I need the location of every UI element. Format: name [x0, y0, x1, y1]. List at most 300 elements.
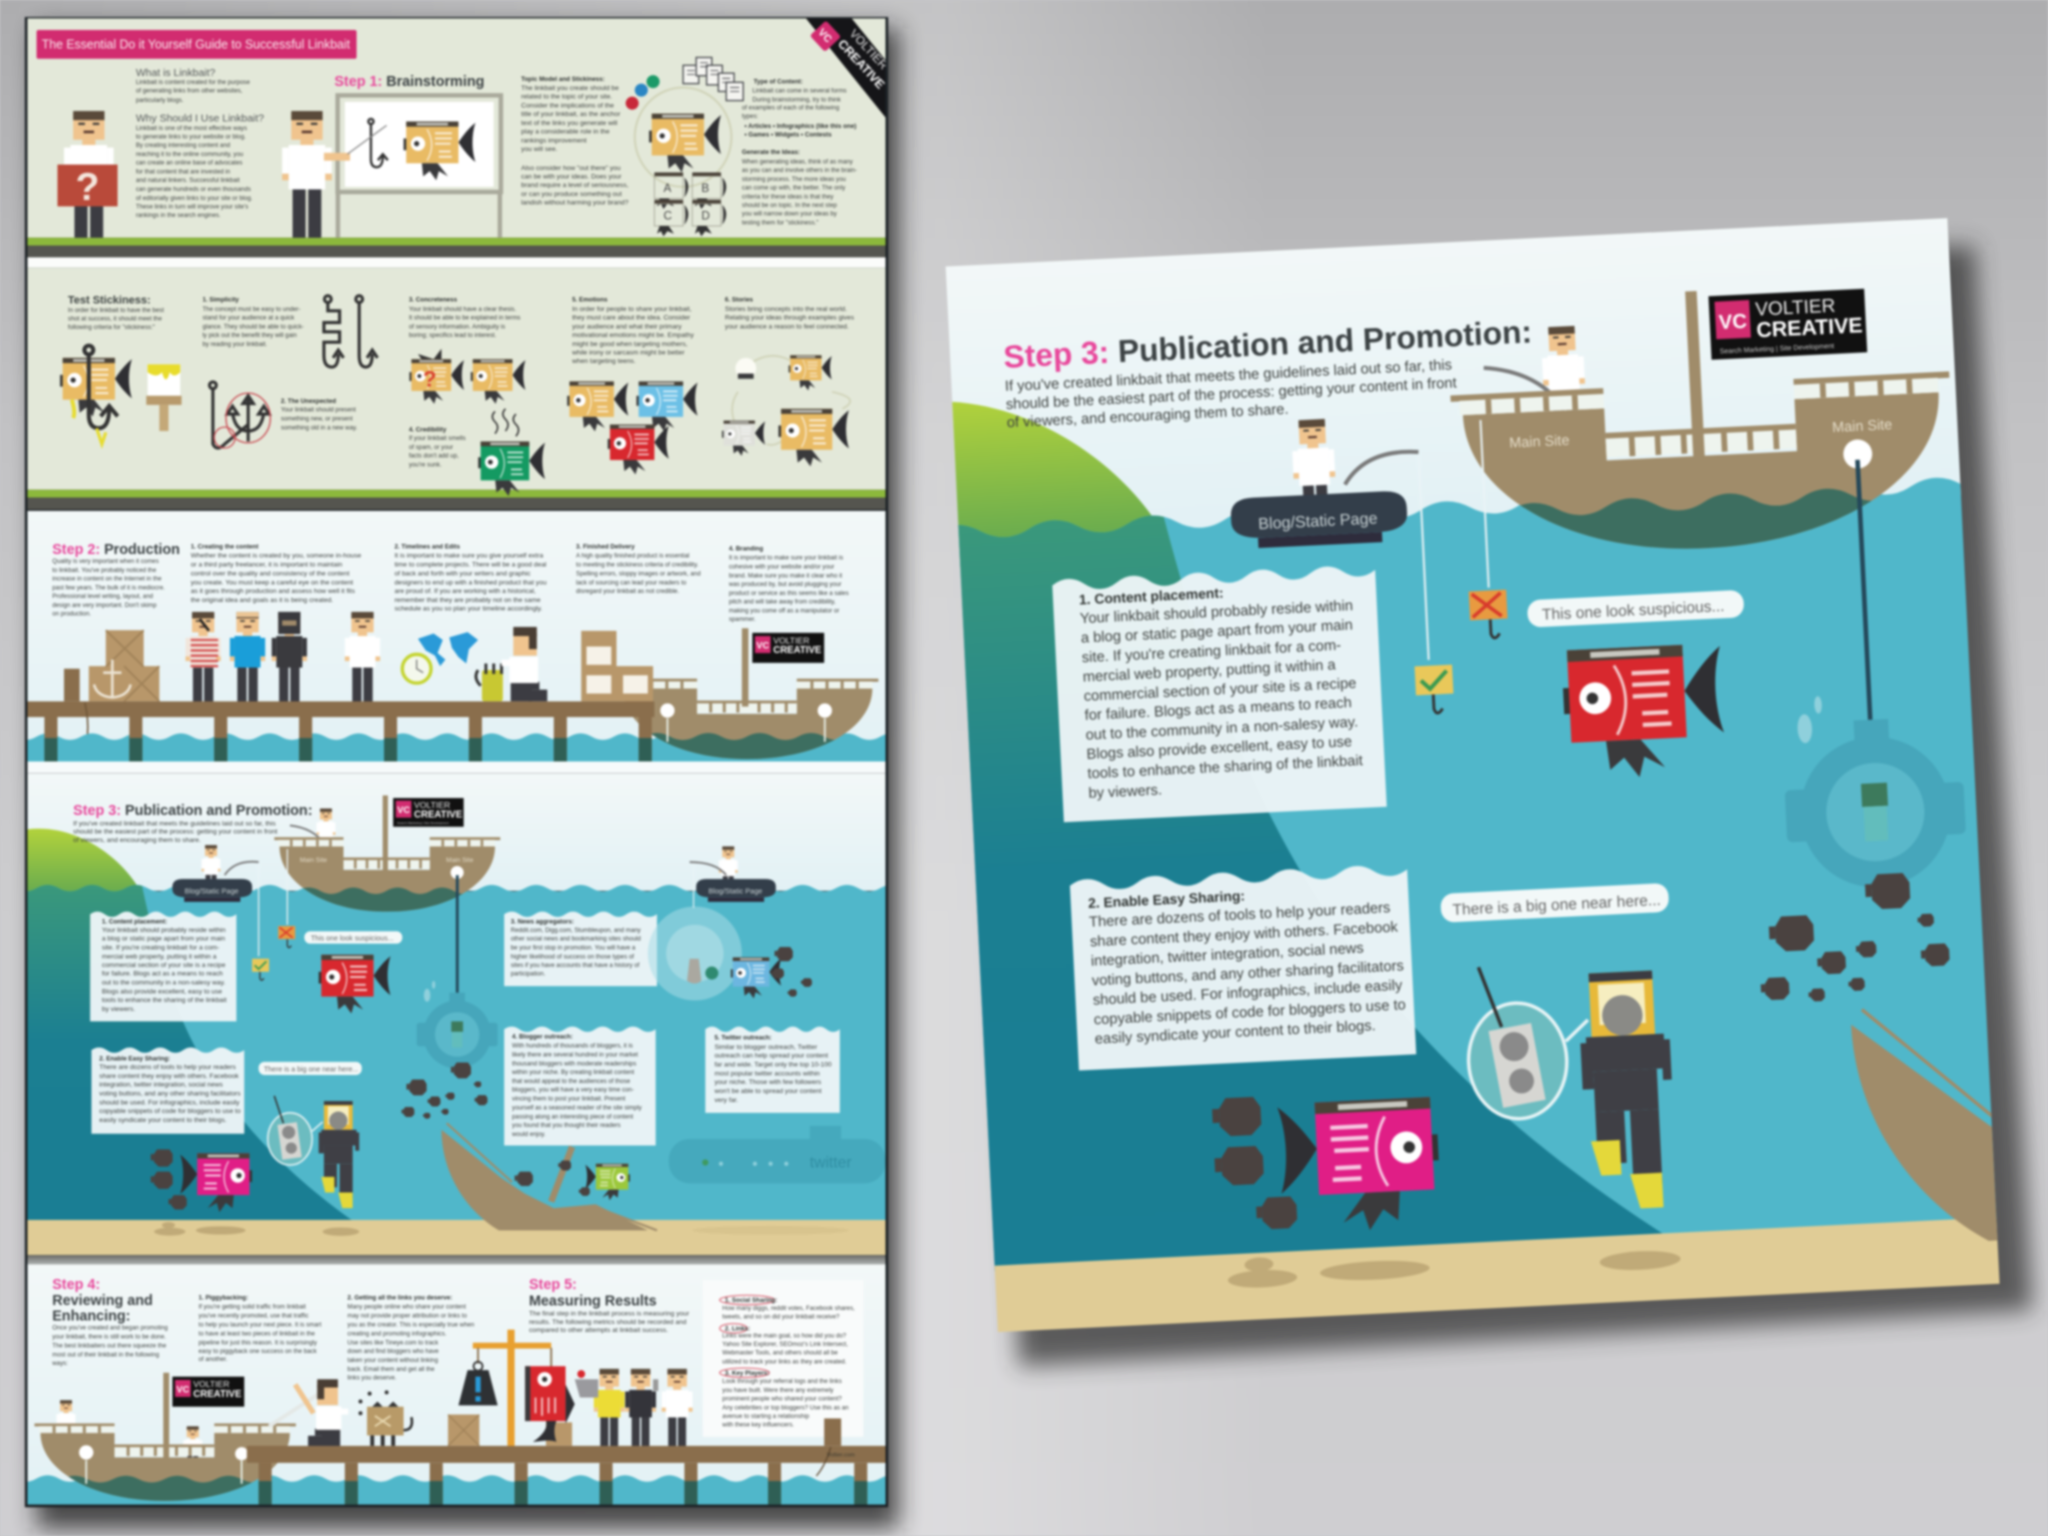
logo flag: VOLTIER: [1755, 296, 1836, 321]
text: simplicity: 1. Simplicity: [202, 297, 239, 304]
text: news aggregators: other social news and bookmarking sites should: [511, 936, 641, 943]
dock: [27, 701, 654, 761]
submarine: [1780, 689, 1968, 891]
text: creating the content: the original idea and goals as it is being created.: [191, 597, 333, 604]
hill above water: [905, 390, 1175, 569]
text: branding: It is important to make sure your linkbait is: [729, 555, 843, 562]
text: content placement: mercial web property, putting it within a: [1082, 657, 1337, 686]
text: why use linkbait: By creating interesting content and: [136, 142, 231, 149]
metrics column: prominent people who shared your content?: [722, 1396, 842, 1403]
text: timelines and edits: are proud of. If you are working with a historical,: [394, 588, 536, 595]
pink fish with followers: [1212, 1088, 1442, 1237]
text: getting the links: Use sites like Tineye.com to track: [347, 1339, 439, 1346]
metrics column: Webmaster Tools, and others should all be: [722, 1350, 838, 1357]
dock: [247, 1418, 886, 1505]
fish with question mark: ?: [423, 367, 436, 392]
logo flag: VOLTIER: [414, 800, 450, 810]
trident hook: [210, 382, 270, 448]
text: getting the links: down and find bloggers who have: [347, 1348, 439, 1355]
text: step 2 intro: to linkbait. You've probably noticed the: [52, 567, 157, 574]
text: branding: making you come off as a manipulator or: [729, 607, 839, 614]
text: content placement: a blog or static page apart from your main: [1081, 617, 1353, 647]
text: branding: product or service as this seems like a sales: [729, 590, 849, 597]
text: why use linkbait: of editorially given links to your site or blog.: [136, 195, 253, 202]
text: piggybacking: pipeline for just this reason. It is surprisingly: [199, 1339, 318, 1346]
text: blogger outreach: passing along an interesting piece of content: [512, 1113, 634, 1120]
fisherman on small boat: [1226, 414, 1423, 549]
mine cluster: [1756, 871, 1951, 1004]
ship with logo flag: CREATIVE: [773, 645, 822, 656]
text: credibility: of spam, or your: [409, 444, 453, 451]
text: creating the content: control over the quality and consistency of the content: [191, 570, 350, 577]
text: timelines and edits: designers to end up with a finished product that you: [394, 579, 547, 586]
text: type of content and generate ideas: When generating ideas, think of as many: [742, 158, 854, 165]
panel: zoomed step 3 detail: [722, 127, 2048, 1363]
text: what is linkbait: What is Linkbait?: [136, 68, 216, 79]
text: step 4 intro: ways:: [51, 1360, 68, 1367]
text: type of content and generate ideas: • Articles • Infographics (like this one): [744, 123, 856, 130]
press crew: [575, 1369, 693, 1447]
logo flag: VC: [1718, 311, 1748, 334]
sand floor: [27, 1220, 886, 1255]
text: enable easy sharing: should be used. For infographics, include easily: [1092, 978, 1403, 1009]
text: branding: spammer.: [729, 616, 756, 623]
ship with crew and flag: VOLTIER: [193, 1379, 230, 1389]
shipwreck: [441, 1123, 657, 1230]
panel: step 2 production: [0, 511, 1775, 768]
text: enable easy sharing: copyable snippets of code for bloggers to use to: [99, 1108, 241, 1115]
diver: [319, 1101, 359, 1208]
text: credibility: you're sunk.: [409, 461, 442, 468]
text: blogger outreach: 4. Blogger outreach:: [512, 1033, 573, 1040]
text: blogger outreach: within your niche. By creating linkbait content: [511, 1069, 635, 1076]
text: concreteness: boring; specifics lead to interest.: [409, 332, 497, 339]
text: emotions: when targeting teens.: [571, 358, 636, 365]
sand floor: [947, 1215, 2047, 1355]
text: content placement: mercial web property, putting it within a: [102, 953, 217, 960]
text: why use linkbait: can generate hundreds or even thousands: [136, 186, 251, 193]
text: type of content and generate ideas: types:: [742, 113, 759, 120]
story fish cycle: [722, 355, 850, 466]
anchor cable: [1855, 460, 1874, 743]
metrics column: with these key influencers.: [721, 1421, 794, 1428]
text: blogger outreach: you found that you thought their readers: [512, 1122, 621, 1129]
text: step 5 intro: compared to other attempts at linkbait success.: [529, 1327, 668, 1334]
text box 5 background: [705, 1027, 840, 1113]
text: credibility: If your linkbait smells: [409, 435, 466, 442]
radio in bubble: [268, 1096, 323, 1165]
text: content placement: Blogs also provide excellent, easy to use: [1086, 734, 1352, 763]
red fish: [319, 955, 391, 1014]
text: twitter outreach: very far.: [714, 1097, 738, 1104]
step 5 heading: Measuring Results: [529, 1293, 657, 1309]
anchor cable: [456, 875, 459, 1003]
text box 1 background: [90, 912, 236, 1021]
text: content placement: site. If you're creating linkbait for a com-: [1081, 638, 1341, 666]
metrics column: you have built. Were there any extremely: [722, 1387, 834, 1394]
text: enable easy sharing: share content they enjoy with others. Facebook: [99, 1073, 239, 1080]
logo flag: CREATIVE: [1756, 313, 1863, 342]
metrics column: 3. Key Players:: [725, 1370, 769, 1377]
step 1 heading: Step 1: Brainstorming: [334, 74, 484, 90]
speech bubble big one: There is a big one near here...: [1452, 892, 1661, 919]
text: step 3 intro: of viewers, and encouraging them to share.: [73, 837, 201, 844]
shipping boxes: [581, 631, 653, 701]
text: enable easy sharing: voting buttons, and any other sharing facilitators: [1092, 958, 1404, 989]
text: branding: brand. Make sure you make it clear who it: [729, 572, 842, 579]
metrics column: How many diggs, reddit votes, Facebook shares,: [722, 1305, 855, 1312]
text: test stickiness intro: shot at success, it should meet the: [68, 316, 162, 323]
step 3 heading: Step 3: Publication and Promotion:: [73, 803, 312, 819]
diver: [1577, 970, 1678, 1211]
text: finished delivery: lack of sourcing can lead your readers to: [576, 579, 687, 586]
sea: [735, 427, 2048, 1282]
left fisherman boat: Blog/Static Page: [185, 886, 239, 895]
shipwreck: [1850, 988, 2048, 1247]
main ship: [1400, 197, 2048, 580]
text: timelines and edits: of back and forth with your writers and graphic: [394, 570, 531, 577]
text: type of content and generate ideas: you will narrow down your ideas by: [742, 211, 838, 218]
hook icons: [324, 296, 377, 367]
main ship: Main Site: [1832, 417, 1893, 436]
ship with logo flag: VC: [756, 640, 770, 650]
text: step 2 intro: on production.: [52, 611, 91, 618]
text: emotions: In order for people to share your linkbait,: [572, 306, 692, 313]
text: creating the content: you create. You must keep a careful eye on the content: [191, 579, 353, 586]
text: content placement: for failure. Blogs act as a means to reach: [102, 971, 223, 978]
text: enable easy sharing: integration, twitter integration, social news: [1091, 941, 1364, 970]
text: blogger outreach: would enjoy.: [511, 1131, 546, 1138]
text: piggybacking: you've recently promoted, use that traffic: [199, 1313, 309, 1320]
man holding question mark sign: [57, 111, 118, 238]
text: getting the links: may not provide proper attribution or links to: [347, 1313, 468, 1320]
panel: steps 4 and 5: [0, 1264, 1192, 1509]
document icons: [683, 57, 743, 101]
step 3 heading: Step 3: Publication and Promotion:: [1003, 313, 1533, 375]
text box 3 background: [504, 912, 657, 986]
text: content placement: a blog or static page apart from your main: [102, 936, 225, 943]
text: why use linkbait: Linkbait is one of the most effective ways: [136, 125, 247, 132]
panel: test stickiness: [27, 257, 886, 509]
text: topic model and stickiness: Consider the implications of the: [521, 102, 614, 109]
grass strip: [27, 238, 886, 246]
text: topic model and stickiness: brand require a level of seriousness,: [521, 182, 629, 189]
text: enable easy sharing: share content they enjoy with others. Facebook: [1090, 919, 1399, 950]
fisherman on small boat: Blog/Static Page: [1258, 509, 1378, 533]
text box 1 background: [1052, 564, 1387, 822]
main ship: Main Site: [446, 857, 474, 864]
text: content placement: Your linkbait should probably reside within: [102, 927, 226, 934]
metrics column: utilized to track your links as they are created.: [722, 1359, 847, 1366]
text: branding: was produced by, but avoid plugging your: [728, 581, 841, 588]
pink fish with followers: [151, 1149, 252, 1212]
text: news aggregators: Reddit.com, Digg.com, Stumbleupon, and many: [511, 927, 642, 934]
text: emotions: while irony or sarcasm might be better: [571, 349, 685, 356]
credit: Voltier.com: [827, 1452, 855, 1458]
text: blogger outreach: that would appeal to the audiences of those: [512, 1078, 631, 1085]
text: type of content and generate ideas: as you can and involve others in the brain-: [742, 167, 857, 174]
text: piggybacking: 1. Piggybacking:: [199, 1295, 248, 1302]
text: type of content and generate ideas: criteria for these ideas is that they: [742, 193, 834, 200]
text: topic model and stickiness: title of your linkbait, as the anchor: [521, 111, 621, 118]
text: why use linkbait: can create an online base of advocates: [136, 160, 242, 167]
text: creating the content: 1. Creating the content: [191, 544, 258, 551]
weighed red fish: [525, 1366, 575, 1446]
text: getting the links: taken your content without linking: [347, 1357, 439, 1364]
right panel shadow: [973, 246, 2032, 1366]
metrics column: tweets, and so on did your linkbait receive?: [722, 1314, 840, 1321]
panel: intro and step 1 brainstorming: [27, 18, 890, 257]
text: content placement: commercial section of your site is a recipe: [102, 962, 226, 969]
logo flag: Search Marketing | Site Development: [397, 821, 449, 825]
ship with logo flag: [593, 628, 1775, 768]
text: piggybacking: to have at least two pieces of linkbait in the: [199, 1330, 316, 1337]
text: test stickiness intro: Test Stickiness:: [68, 295, 151, 307]
speech bubble big one: [1440, 883, 1669, 923]
panel: step 3 publication and promotion: [0, 773, 1275, 1255]
text: step 2 intro: Quality is very important when it comes: [52, 558, 159, 565]
text: piggybacking: to help you launch your next piece. It is smart: [199, 1321, 322, 1328]
text: topic model and stickiness: you will see.: [521, 146, 558, 153]
text: emotions: your audience and what their primary: [572, 323, 682, 330]
text: timelines and edits: 2. Timelines and Edits: [394, 544, 461, 551]
speech bubble suspicious: [304, 931, 402, 944]
text: simplicity: glance. They should be able to quick-: [202, 323, 304, 330]
text: type of content and generate ideas: storming process. The more ideas you: [742, 176, 846, 183]
text: content placement: out to the community in a non-salesy way.: [1085, 714, 1358, 744]
metrics column: Links were the main goal, so how did you do?: [722, 1332, 847, 1339]
text: twitter outreach: outreach can help spread your content: [714, 1053, 828, 1060]
metrics column: Any celebrities or top bloggers? Use this as an: [722, 1404, 849, 1411]
text: twitter outreach: most popular twitter accounts within: [714, 1070, 820, 1077]
text: getting the links: Many people online who share your content: [347, 1304, 466, 1311]
text: type of content and generate ideas: During brainstorming, try to think: [752, 96, 842, 103]
text: getting the links: creating and promoting infographics.: [347, 1330, 447, 1337]
text: type of content and generate ideas: testing them for "stickiness.": [742, 220, 818, 227]
text: content placement: tools to enhance the sharing of the linkbait: [102, 997, 227, 1004]
fishing lines with hooked fish: [252, 849, 295, 980]
text: branding: 4. Branding: [729, 546, 763, 553]
text: twitter outreach: 5. Twitter outreach:: [714, 1035, 772, 1042]
logo flag: CREATIVE: [414, 810, 463, 821]
text: news aggregators: participation.: [511, 971, 546, 978]
text: branding: cohesive with your website and/or your: [729, 564, 834, 571]
text: type of content and generate ideas: Type of Content:: [754, 79, 803, 86]
corner ribbon logo: CREATIVE: [835, 37, 887, 92]
red fish: [1561, 643, 1726, 781]
text: step 5 intro: results. The following metrics should be recorded and: [529, 1319, 687, 1326]
text: topic model and stickiness: landish without harming your brand?: [521, 200, 629, 207]
text: the unexpected: 2. The Unexpected: [281, 398, 336, 405]
kneeling man with sword: [269, 1379, 348, 1446]
text: why use linkbait: for that content that are invested in: [136, 168, 231, 175]
text: news aggregators: 3. News aggregators:: [511, 918, 574, 925]
text: stories: Relating your ideas through examples gives: [725, 314, 855, 321]
step 4 heading: Enhancing:: [52, 1308, 130, 1324]
ship with crew and flag: VC: [177, 1384, 190, 1394]
submarine with diver: [417, 981, 498, 1068]
text: topic model and stickiness: text of the links you generate will: [521, 120, 618, 127]
text: content placement: tools to enhance the sharing of the linkbait: [1087, 753, 1363, 782]
deep water slope: [908, 442, 1671, 1274]
text: getting the links: you as the creator. This is especially true when: [347, 1321, 475, 1328]
text: creating the content: Whether the content is created by you, someone in-house: [191, 553, 362, 560]
orange scale with weight: [458, 1330, 551, 1447]
presenter man: [282, 111, 387, 238]
small fish outlines A B C D: B: [701, 182, 709, 195]
main ship: [253, 795, 1275, 920]
text: content placement: Your linkbait should probably reside within: [1080, 598, 1353, 627]
metrics column: avenue to starting a relationship: [722, 1413, 810, 1420]
crate: [448, 1415, 479, 1446]
text: getting the links: back. Email them and get all the: [347, 1366, 435, 1373]
text: why use linkbait: These links in turn will improve your site's: [136, 203, 248, 210]
small fish outlines A B C D: D: [701, 209, 710, 222]
text: content placement: Blogs also provide excellent, easy to use: [102, 988, 222, 995]
boxed cat fish: [359, 1390, 412, 1446]
small fish outlines A B C D: [654, 172, 726, 236]
text: content placement: by viewers.: [102, 1006, 135, 1013]
fish with question mark: [409, 349, 464, 404]
text: timelines and edits: time to complete projects. There will be a good deal: [394, 562, 547, 569]
text: concreteness: Your linkbait should have a clear thesis.: [409, 306, 516, 313]
ship with logo flag: VOLTIER: [773, 635, 809, 645]
text: twitter outreach: far and wide. Target only the top 10-100: [714, 1062, 832, 1069]
right fisherman boat: Blog/Static Page: [708, 886, 762, 895]
text: content placement: out to the community in a non-salesy way.: [102, 980, 225, 987]
logo flag: VC: [397, 805, 410, 815]
text: why use linkbait: and natural linkers. Successful linkbait: [136, 177, 240, 184]
text: type of content and generate ideas: • Games • Widgets • Contests: [744, 131, 832, 138]
corner ribbon logo: VC: [815, 27, 834, 46]
text: piggybacking: If you're getting solid traffic from linkbait: [199, 1304, 306, 1311]
text: topic model and stickiness: or can you produce something out: [521, 191, 622, 198]
text: enable easy sharing: There are dozens of tools to help your readers: [1089, 900, 1391, 931]
step 4 heading: Reviewing and: [52, 1293, 153, 1309]
text: step 4 intro: Once you've created and began promoting: [52, 1325, 168, 1332]
emotion fish trio: [567, 381, 698, 474]
spotlight bubble with bottle and fish: [648, 906, 812, 1000]
corner ribbon logo: VOLTIER: [847, 27, 890, 72]
text: type of content and generate ideas: of examples of each of the following: [742, 105, 840, 112]
text: twitter outreach: won't be able to spread your content: [713, 1088, 822, 1095]
glue brush: [146, 364, 182, 431]
text: step 3 intro: should be the easiest part of the process: getting your content in front: [1005, 375, 1457, 413]
small fish outlines A B C D: C: [664, 209, 673, 222]
panel: left poster: [23, 16, 890, 1509]
text: emotions: 5. Emotions: [572, 297, 608, 304]
text: concreteness: 3. Concreteness: [409, 297, 458, 304]
step 5 heading: Step 5:: [529, 1277, 577, 1293]
text box 2 background: [1070, 864, 1416, 1071]
text: emotions: motivational emotions might be. Empathy: [572, 332, 694, 339]
text: stories: your audience a reason to feel connected.: [725, 323, 849, 330]
sea: [0, 885, 969, 1223]
text: piggybacking: of another.: [199, 1356, 228, 1363]
ship with crew and flag: [10, 1373, 1192, 1509]
text: enable easy sharing: 2. Enable Easy Sharing:: [99, 1056, 170, 1063]
speech bubble big one: [259, 1062, 362, 1075]
brainstorming whiteboard: [336, 95, 502, 238]
clock and world map: [402, 632, 478, 683]
ship with crew and flag: CREATIVE: [193, 1389, 242, 1400]
text: blogger outreach: bloggers, you will have a very easy time con-: [512, 1087, 634, 1094]
text: why use linkbait: rankings in the search engines.: [136, 212, 221, 219]
text: timelines and edits: schedule as you so plan your timeline accordingly.: [394, 606, 542, 613]
text: step 4 intro: The best linkbaiters out there squeeze the: [52, 1342, 167, 1349]
speech bubble suspicious: This one look suspicious...: [1542, 598, 1725, 624]
text: finished delivery: disregard your linkbait as not credible.: [576, 588, 679, 595]
metrics column: 1. Social Sharing:: [725, 1297, 777, 1304]
speech bubble suspicious: This one look suspicious...: [311, 935, 394, 942]
text: step 2 intro: design are very important. Don't skimp: [52, 602, 157, 609]
text: step 2 intro: increase in content on the Internet in the: [52, 576, 162, 583]
green stinky fish: [478, 409, 545, 496]
text: topic model and stickiness: play a considerable role in the: [521, 129, 610, 136]
left fisherman boat: [172, 845, 259, 902]
text: simplicity: stand for your audience at a quick: [202, 315, 295, 322]
text: simplicity: by reading your linkbait.: [202, 341, 267, 348]
poster shadow: [37, 29, 899, 1528]
text: test stickiness intro: following criteria for "stickiness:": [68, 324, 155, 331]
step 4 heading: Step 4:: [52, 1277, 100, 1293]
main ship: Main Site: [300, 857, 327, 864]
text: test stickiness intro: In order for linkbait to have the best: [68, 307, 164, 314]
fish tan: [471, 359, 525, 404]
text: topic model and stickiness: rankings improvement: [521, 137, 587, 144]
text: enable easy sharing: easily syndicate your content to their blogs.: [1094, 1018, 1376, 1048]
text: emotions: they must care about the idea. Consider: [572, 315, 691, 322]
text: news aggregators: higher likelihood of success on those types of: [511, 953, 634, 960]
text: simplicity: ly pick out the benefit they will gain: [202, 332, 297, 339]
production team: [186, 612, 380, 702]
text: why use linkbait: to generate links to your website or blog.: [136, 133, 246, 140]
logo flag: Search Marketing | Site Development: [1720, 343, 1834, 356]
text: the unexpected: Your linkbait should present: [281, 406, 356, 413]
logo flag: [393, 798, 464, 827]
text: type of content and generate ideas: should be on topic. In the next step: [742, 202, 837, 209]
text: step 2 intro: Professional level writing, layout, and: [52, 593, 154, 600]
text: type of content and generate ideas: Linkbait can come in several forms: [752, 88, 847, 95]
text: enable easy sharing: voting buttons, and any other sharing facilitators: [99, 1091, 241, 1098]
text: topic model and stickiness: Topic Model and Stickiness:: [521, 76, 605, 83]
text: content placement: commercial section of your site is a recipe: [1083, 676, 1357, 705]
sea: [0, 1475, 969, 1507]
text: what is linkbait: Linkbait is content created for the purpose: [136, 79, 250, 86]
text: stories: Stories bring concepts into the real world.: [725, 306, 847, 313]
text: finished delivery: 3. Finished Delivery: [576, 544, 635, 551]
text: why use linkbait: reaching it to the online community, you: [136, 151, 243, 158]
text: the unexpected: something old in a new way.: [281, 424, 358, 431]
text: blogger outreach: likely there are several hundred in your market: [512, 1051, 638, 1058]
fishing lines with hooked fish: [1403, 419, 1512, 714]
text: enable easy sharing: easily syndicate your content to their blogs.: [99, 1117, 227, 1124]
text: step 5 intro: The final step in the linkbait process is measuring your: [529, 1310, 690, 1317]
coloured idea dots: [626, 75, 660, 110]
text: topic model and stickiness: can be with your ideas. Does your: [521, 173, 622, 180]
text: topic model and stickiness: The linkbait you create should be: [521, 85, 619, 92]
sea: [0, 733, 969, 765]
text: step 2 intro: past few years. The bulk of it is mediocre.: [52, 584, 165, 591]
text: step 4 intro: most out of their linkbait in the following: [52, 1351, 160, 1358]
text: twitter outreach: your niche. Those with few followers: [714, 1079, 822, 1086]
text: content placement: for failure. Blogs act as a means to reach: [1084, 695, 1352, 724]
text: content placement: 1. Content placement:: [102, 918, 167, 925]
right fisherman boat: [690, 846, 776, 908]
text: getting the links: links you deserve.: [347, 1374, 397, 1381]
man holding question mark sign: ?: [76, 166, 99, 209]
text: finished delivery: A high quality finished product is essential: [576, 553, 689, 560]
